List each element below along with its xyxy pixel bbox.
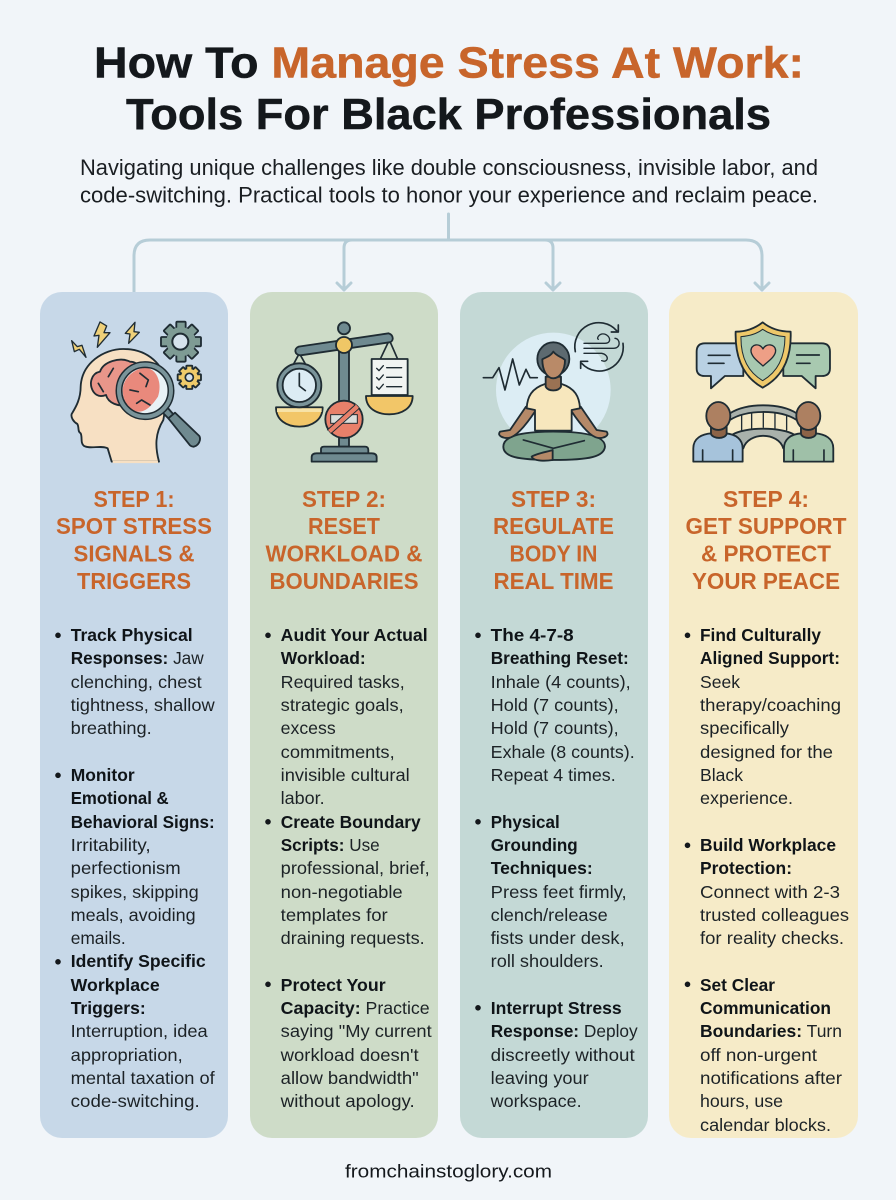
text block: step 2 tips: non-negotiable [281,882,403,902]
text block: step 3 tips: Repeat 4 times. [491,765,616,785]
text block: step 3 tips: discreetly without [491,1045,635,1065]
text block: step 4 tips: therapy/coaching [700,695,841,715]
text block: step 2 tips: professional, brief, [281,858,430,878]
text block: step 1 tips: perfectionism [71,858,181,878]
subtitle: Navigating unique challenges like double consciousness, invisible labor, and [80,155,818,180]
text block: step 4 tips: Seek [700,672,740,692]
text block: step 1 tips: Identify Specific [71,951,206,971]
heading: step 2: BOUNDARIES [270,568,418,594]
text block: step 1 tips: meals, avoiding [71,905,196,925]
heading: step 1: TRIGGERS [77,568,191,594]
text block: step 4 tips: off non-urgent [700,1045,817,1065]
text block: step 4 tips: Set Clear [700,975,775,995]
text block: step 1 tips: breathing. [71,718,152,738]
heading: step 4: STEP 4: [723,486,809,512]
text block: step 2 tips: excess [281,718,336,738]
text block: step 2 tips: Scripts: Use [281,835,380,855]
text block: step 2 tips: draining requests. [281,928,425,948]
text block: step 1 tips [55,625,215,1111]
heading: step 3: REAL TIME [494,568,614,594]
text block: step 4 tips [685,625,849,1135]
icon: meditating person with breath cycle [483,323,623,461]
title: How To Manage Stress At Work: [94,38,804,88]
subtitle: code-switching. Practical tools to honor your experience and reclaim peace. [80,182,818,208]
text block: step 1 tips: tightness, shallow [71,695,215,715]
text block: step 3 tips: Physical [491,812,560,832]
text block: step 4 tips: experience. [700,788,793,808]
heading: step 2: RESET [308,513,380,539]
text block: step 2 tips: labor. [281,788,325,808]
text block: step 3 tips: fists under desk, [491,928,625,948]
text block: step 4 tips: Black [700,765,743,785]
text block: step 4 tips: Communication [700,998,831,1018]
text block: step 1 tips: Responses: Jaw [71,648,204,668]
text block: step 3 tips: Grounding [491,835,578,855]
text block: step 1 tips: Monitor [71,765,135,785]
text block: step 3 tips: roll shoulders. [491,951,604,971]
text block: step 3 tips: Breathing Reset: [491,648,629,668]
heading: step 3: STEP 3: [511,486,596,512]
title [94,38,804,139]
text block: step 4 tips: Build Workplace [700,835,836,855]
text block: step 2 tips: Audit Your Actual [281,625,428,645]
text block: step 4 tips: calendar blocks. [700,1115,831,1135]
heading: step 2: STEP 2: [302,486,386,512]
connector arrows [134,214,769,292]
heading: step 1 [56,486,212,594]
text block: step 3 tips: Interrupt Stress [491,998,622,1018]
text block: step 1 tips: Behavioral Signs: [71,812,215,832]
text block: step 3 tips: Exhale (8 counts). [491,742,635,762]
text block: step 1 tips: Workplace [71,975,160,995]
text block: step 4 tips: for reality checks. [700,928,844,948]
text block: step 2 tips: Capacity: Practice [281,998,430,1018]
text block: step 2 tips: Create Boundary [281,812,421,832]
text block: step 4 tips: Find Culturally [700,625,821,645]
text block: step 3 tips: leaving your [491,1068,589,1088]
text block: step 1 tips: spikes, skipping [71,882,199,902]
text block: step 4 tips: Protection: [700,858,792,878]
heading: step 2: WORKLOAD & [266,540,423,566]
text block: step 4 tips: hours, use [700,1091,783,1111]
text block: step 4 tips: trusted colleagues [700,905,849,925]
panel: step 4 [669,292,858,1138]
panel: step 3 [460,292,648,1138]
text block: step 3 tips: clench/release [491,905,608,925]
heading: step 4: YOUR PEACE [692,568,840,594]
text block: step 1 tips: mental taxation of [71,1068,215,1088]
text block: step 2 tips: Workload: [281,648,366,668]
heading: step 2 [266,486,423,594]
text block: step 3 tips: Techniques: [491,858,593,878]
text block: step 1 tips: clenching, chest [71,672,202,692]
text block: step 2 tips [265,625,432,1111]
text block: step 2 tips: without apology. [280,1091,415,1111]
heading: step 1: SIGNALS & [74,540,195,566]
footer: fromchainstoglory.com [345,1160,552,1182]
text block: step 2 tips: Protect Your [281,975,386,995]
text block: step 4 tips: specifically [700,718,789,738]
heading: step 1: SPOT STRESS [56,513,212,539]
title: Tools For Black Professionals [126,90,771,139]
panel: step 1 [40,292,228,1138]
text block: step 4 tips: Aligned Support: [700,648,840,668]
text block: step 1 tips: Interruption, idea [71,1021,208,1041]
icon: balance scale with clock and checklist [276,322,413,462]
text block: step 2 tips: commitments, [281,742,395,762]
heading: step 3 [493,486,614,594]
text block: step 1 tips: emails. [71,928,126,948]
text block: step 1 tips: Irritability, [71,835,151,855]
text block: step 3 tips: Hold (7 counts), [491,718,619,738]
heading: step 1: STEP 1: [94,486,174,512]
panel: step 2 [250,292,438,1138]
text block: step 2 tips: workload doesn't [280,1045,419,1065]
text block: step 4 tips: designed for the [700,742,833,762]
text block: step 2 tips: saying "My current [281,1021,432,1041]
text block: step 2 tips: templates for [281,905,388,925]
subtitle [80,155,818,208]
text block: step 3 tips: Press feet firmly, [491,882,627,902]
text block: step 1 tips: code-switching. [71,1091,200,1111]
text block: step 1 tips: appropriation, [71,1045,183,1065]
text block: step 3 tips: The 4-7-8 [491,625,574,645]
text block: step 2 tips: Required tasks, [281,672,405,692]
text block: step 3 tips [475,625,638,1111]
text block: step 1 tips: Emotional & [71,788,169,808]
text block: step 2 tips: strategic goals, [281,695,404,715]
text block: step 3 tips: Hold (7 counts), [491,695,619,715]
icon: head with brain under magnifier [71,322,201,462]
heading: step 4: & PROTECT [701,540,831,566]
heading: step 3: REGULATE [493,513,614,539]
text block: step 4 tips: Boundaries: Turn [700,1021,842,1041]
text block: step 3 tips: workspace. [490,1091,582,1111]
text block: step 3 tips: Response: Deploy [491,1021,638,1041]
text block: step 4 tips: notifications after [700,1068,842,1088]
text block: step 4 tips: Connect with 2-3 [700,882,840,902]
heading: step 4 [686,486,846,594]
icon: shield, speech bubbles and bridge [693,322,833,462]
heading: step 3: BODY IN [510,540,598,566]
text block: step 1 tips: Track Physical [71,625,193,645]
text block: step 2 tips: invisible cultural [281,765,410,785]
text block: step 2 tips: allow bandwidth" [281,1068,419,1088]
text block: step 3 tips: Inhale (4 counts), [491,672,631,692]
heading: step 4: GET SUPPORT [686,513,846,539]
text block: step 1 tips: Triggers: [71,998,146,1018]
